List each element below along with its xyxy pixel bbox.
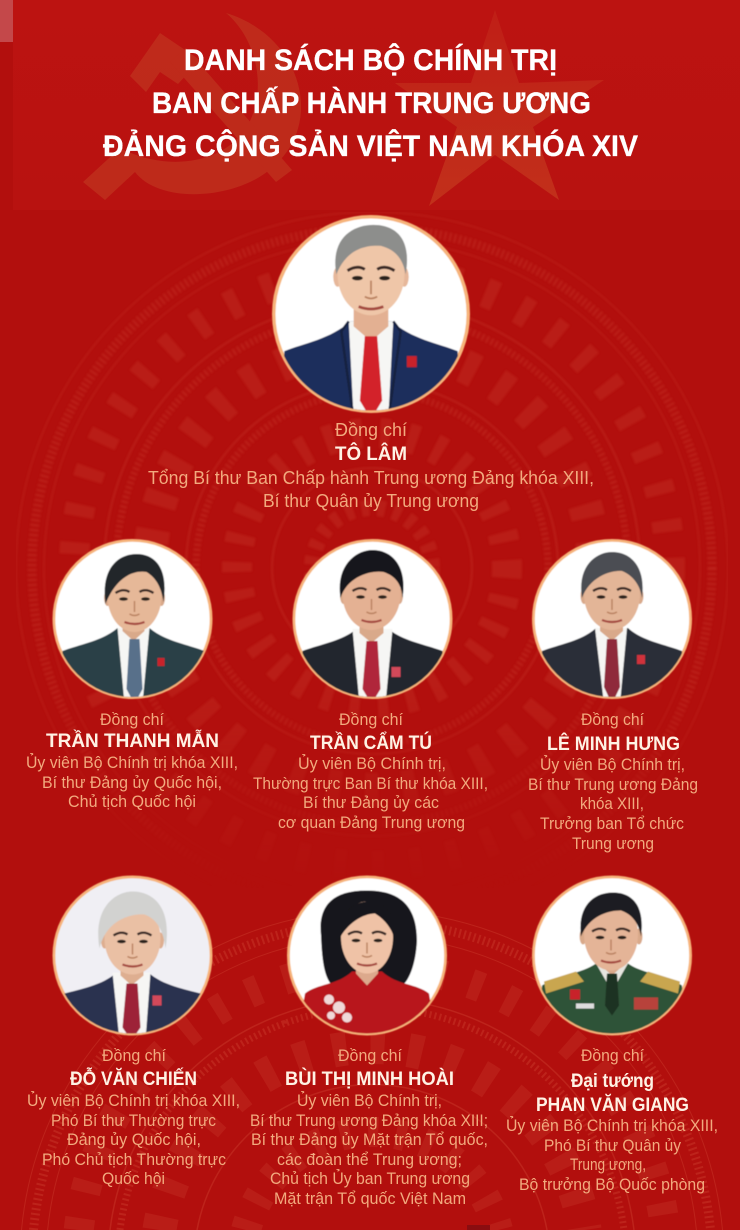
person: Trần Thanh Mẫn: Ủy viên Bộ Chính trị khóa XIII, (26, 753, 238, 772)
person: Đỗ Văn Chiến: Đảng ủy Quốc hội, (67, 1130, 201, 1149)
person: Phan Văn Giang: PHAN VĂN GIANG (536, 1094, 689, 1116)
title: BAN CHẤP HÀNH TRUNG ƯƠNG (152, 86, 591, 120)
pattern: lower bronze drum (22, 910, 722, 1230)
person: Lê Minh Hưng: Trưởng ban Tổ chức (540, 814, 684, 833)
person: Bùi Thị Minh Hoài: Bí thư Trung ương Đảng khóa XIII; (250, 1111, 488, 1130)
person: Trần Cẩm Tú: Thường trực Ban Bí thư khóa XIII, (253, 774, 488, 793)
person: Trần Cẩm Tú: Đồng chí (339, 710, 403, 729)
person: Bùi Thị Minh Hoài: Mặt trận Tổ quốc Việt Nam (274, 1189, 466, 1208)
person: Bùi Thị Minh Hoài: Đồng chí (338, 1046, 402, 1065)
person: Lê Minh Hưng: khóa XIII, (580, 794, 644, 813)
person: Bùi Thị Minh Hoài: Bí thư Đảng ủy Mặt trận Tổ quốc, (251, 1130, 488, 1149)
person: Trần Cẩm Tú: cơ quan Đảng Trung ương (278, 813, 465, 832)
person: Trần Cẩm Tú: Ủy viên Bộ Chính trị, (298, 754, 446, 773)
person: Trần Cẩm Tú: Bí thư Đảng ủy các (303, 793, 439, 812)
person: Tô Lâm: Tổng Bí thư Ban Chấp hành Trung ương Đảng khóa XIII, (148, 468, 594, 488)
title: DANH SÁCH BỘ CHÍNH TRỊ (184, 43, 557, 77)
person: Trần Thanh Mẫn: Chủ tịch Quốc hội (68, 792, 196, 811)
person: Tô Lâm (148, 420, 594, 511)
person: Đỗ Văn Chiến: Phó Bí thư Thường trực (51, 1111, 216, 1130)
person: Phan Văn Giang (506, 1046, 718, 1194)
title (103, 43, 638, 163)
title: ĐẢNG CỘNG SẢN VIỆT NAM KHÓA XIV (103, 129, 638, 163)
person: Bùi Thị Minh Hoài: các đoàn thể Trung ương; (277, 1150, 462, 1169)
person: Đỗ Văn Chiến: Ủy viên Bộ Chính trị khóa XIII, (27, 1091, 240, 1110)
person: Trần Cẩm Tú: TRẦN CẨM TÚ (310, 732, 432, 754)
person: Lê Minh Hưng: Đồng chí (581, 710, 644, 729)
icon: star watermark (395, 10, 604, 206)
person: Trần Thanh Mẫn: Đồng chí (100, 710, 164, 729)
person: Tô Lâm: Bí thư Quân ủy Trung ương (263, 491, 479, 511)
person: Phan Văn Giang: Bộ trưởng Bộ Quốc phòng (519, 1175, 705, 1194)
person: Phan Văn Giang: Đại tướng (571, 1071, 654, 1092)
person: Bùi Thị Minh Hoài (250, 1046, 488, 1208)
person: Bùi Thị Minh Hoài: Chủ tịch Ủy ban Trung ương (270, 1169, 470, 1188)
person: Phan Văn Giang: Trung ương, (570, 1155, 646, 1174)
portrait: Tô Lâm (274, 217, 468, 419)
pattern: upper bronze drum (28, 228, 716, 764)
person: Lê Minh Hưng: Bí thư Trung ương Đảng (528, 775, 698, 794)
person: Trần Cẩm Tú (253, 710, 488, 832)
person: Bùi Thị Minh Hoài: Ủy viên Bộ Chính trị, (297, 1091, 442, 1110)
person: Lê Minh Hưng: Trung ương (572, 834, 654, 853)
person: Đỗ Văn Chiến: Quốc hội (102, 1169, 165, 1188)
person: Tô Lâm: TÔ LÂM (335, 443, 407, 465)
person: Đỗ Văn Chiến: Đồng chí (102, 1046, 166, 1065)
person: Lê Minh Hưng: Ủy viên Bộ Chính trị, (540, 755, 685, 774)
portrait: Phan Văn Giang (533, 877, 691, 1040)
portrait: Lê Minh Hưng (533, 540, 691, 704)
portrait: Bùi Thị Minh Hoài (288, 877, 446, 1040)
portrait: Đỗ Văn Chiến (54, 877, 211, 1040)
person: Đỗ Văn Chiến: ĐỖ VĂN CHIẾN (70, 1068, 197, 1090)
person: Phan Văn Giang: Phó Bí thư Quân ủy (544, 1136, 681, 1155)
person: Trần Thanh Mẫn (26, 710, 238, 811)
person: Phan Văn Giang: Ủy viên Bộ Chính trị khóa XIII, (506, 1116, 718, 1135)
person: Đỗ Văn Chiến (27, 1046, 240, 1188)
person: Tô Lâm: Đồng chí (335, 420, 407, 440)
person: Trần Thanh Mẫn: Bí thư Đảng ủy Quốc hội, (42, 773, 222, 792)
person: Lê Minh Hưng (528, 710, 698, 853)
top banner background (0, 0, 740, 210)
person: Lê Minh Hưng: LÊ MINH HƯNG (547, 733, 680, 755)
person: Đỗ Văn Chiến: Phó Chủ tịch Thường trực (42, 1150, 226, 1169)
person: Bùi Thị Minh Hoài: BÙI THỊ MINH HOÀI (285, 1068, 454, 1090)
icon: hammer and sickle watermark (83, 13, 301, 200)
person: Trần Thanh Mẫn: TRẦN THANH MẪN (46, 730, 219, 752)
person: Phan Văn Giang: Đồng chí (581, 1046, 644, 1065)
portrait: Trần Thanh Mẫn (54, 540, 211, 704)
portrait: Trần Cẩm Tú (294, 540, 451, 704)
